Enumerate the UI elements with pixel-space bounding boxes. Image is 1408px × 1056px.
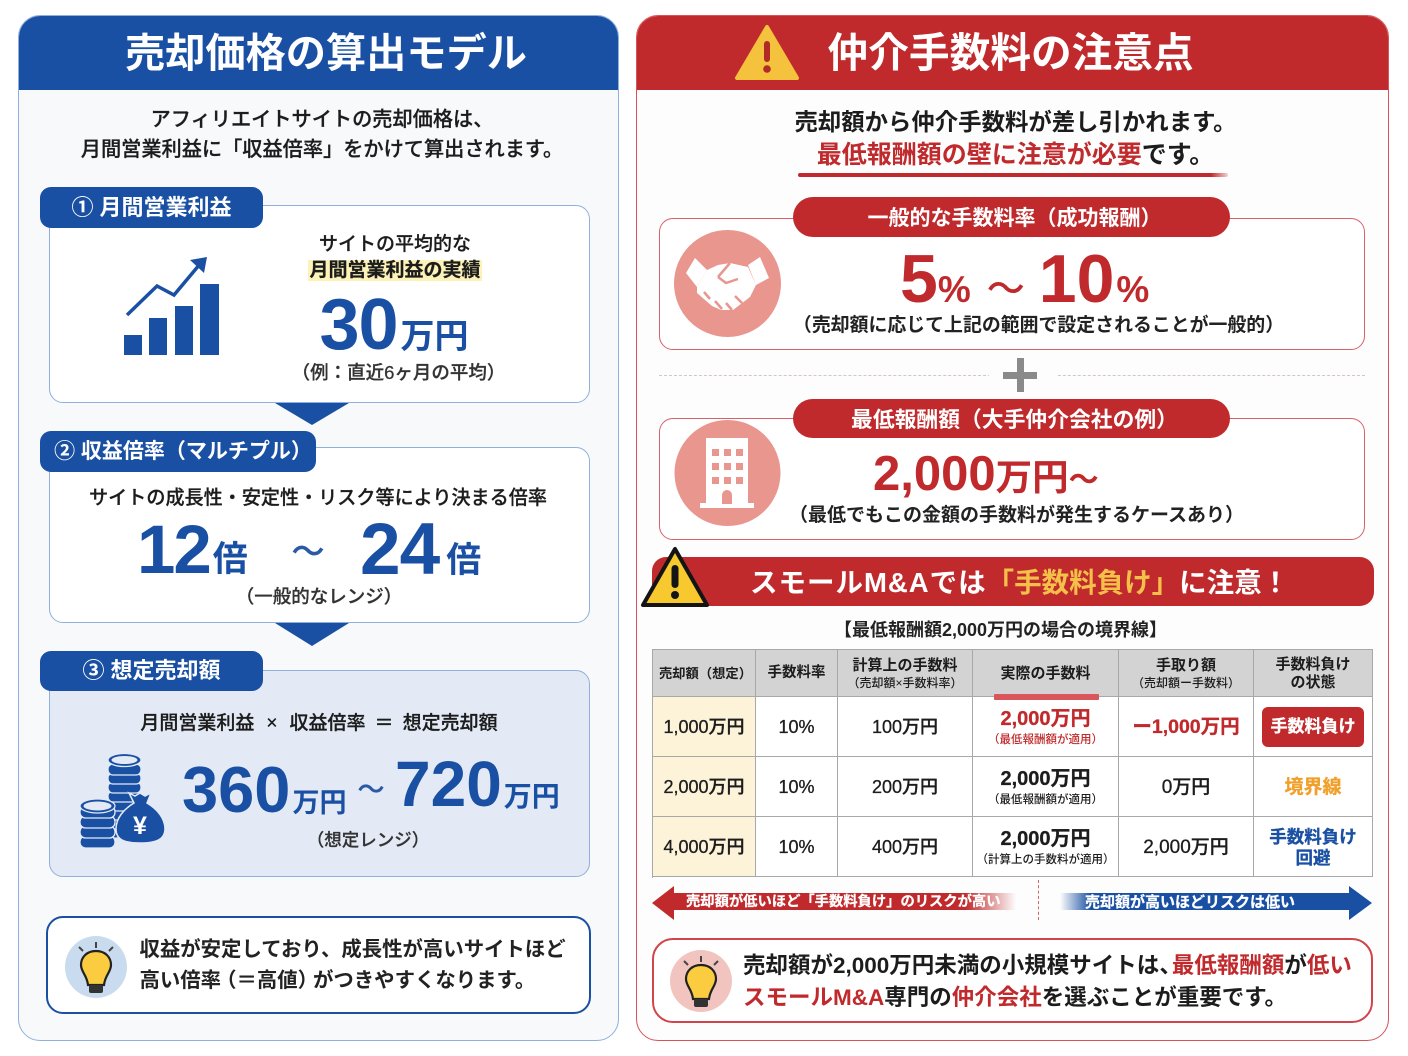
value: 12 times: 12倍 bbox=[137, 511, 248, 588]
table header row: 売却額（想定） bbox=[659, 666, 752, 681]
value: 3.6M yen: 360万円 bbox=[182, 753, 346, 826]
table row: 40M yen: 2,000万円 bbox=[1143, 837, 1229, 858]
text: right tip: スモールM&A専門の仲介会社を選ぶことが重要です。 bbox=[743, 985, 1287, 1010]
panel: broker fee caution bbox=[636, 15, 1389, 1041]
tab: multiple bbox=[40, 431, 316, 472]
icon: handshake bbox=[674, 230, 781, 337]
intro text: right bbox=[794, 109, 1237, 169]
table header row: 実際の手数料 bbox=[1000, 665, 1090, 682]
text: range tilde left: ～ bbox=[292, 533, 324, 570]
table row: 40M yen: 10% bbox=[778, 837, 815, 857]
icon: light bulb left bbox=[65, 936, 127, 998]
table row: 40M yen: 2,000万円 bbox=[1000, 828, 1091, 850]
table header row: （売却額ー手数料） bbox=[1132, 676, 1240, 690]
icon: banner warning bbox=[640, 546, 709, 607]
underline: emphasis bbox=[798, 173, 1228, 177]
table header row: 手取り額 bbox=[1156, 657, 1216, 674]
icon: light bulb right bbox=[670, 950, 732, 1012]
card: estimated sale price bbox=[49, 670, 590, 877]
table row: 20M yen: 境界線 bbox=[1284, 777, 1342, 798]
heading: sale price model bbox=[18, 14, 618, 90]
tab: general fee rate: 一般的な手数料率（成功報酬） bbox=[868, 207, 1162, 230]
table row: 10M yen: 1,000万円 bbox=[663, 717, 745, 737]
table row: 10M yen: 10% bbox=[778, 717, 815, 737]
intro text: left: アフィリエイトサイトの売却価格は、 bbox=[151, 109, 493, 131]
note: general range: （一般的なレンジ） bbox=[236, 586, 402, 607]
card: monthly operating profit bbox=[49, 205, 590, 403]
table header row: 手数料率 bbox=[768, 665, 826, 681]
icon: growth chart bbox=[124, 257, 219, 355]
table header row: 計算上の手数料 bbox=[852, 657, 958, 674]
text: multiple description: サイトの成長性・安定性・リスク等により決まる倍率 bbox=[89, 488, 547, 509]
table row: 40M yen bbox=[653, 817, 1373, 877]
heading: broker fee caution: 仲介手数料の注意点 bbox=[828, 30, 1194, 76]
note: fee rate range: （売却額に応じて上記の範囲で設定されることが一般的） bbox=[793, 315, 1284, 336]
text: right tip: 売却額が2,000万円未満の小規模サイトは、最低報酬額が低い bbox=[743, 953, 1352, 978]
table row: 40M yen: 400万円 bbox=[872, 837, 938, 857]
table row: 10M yen: 手数料負け bbox=[1270, 716, 1356, 736]
divider: risk axis bbox=[1038, 880, 1039, 920]
text: left tip bbox=[140, 938, 566, 992]
tab: minimum fee: 最低報酬額（大手仲介会社の例） bbox=[851, 407, 1178, 432]
heading: sale price model: 売却価格の算出モデル bbox=[125, 30, 527, 76]
value: 24 times: 24倍 bbox=[360, 509, 481, 590]
table row: 40M yen: （計算上の手数料が適用） bbox=[976, 854, 1114, 866]
note: minimum fee: （最低でもこの金額の手数料が発生するケースあり） bbox=[789, 505, 1244, 526]
intro text: right: 最低報酬額の壁に注意が必要です。 bbox=[817, 141, 1214, 169]
separator plus sign bbox=[659, 358, 1365, 392]
tab: estimated sale price bbox=[40, 651, 263, 691]
table accent: actual fee underline bbox=[994, 694, 1099, 700]
intro text: right: 売却額から仲介手数料が差し引かれます。 bbox=[794, 109, 1237, 135]
table row: 20M yen: 10% bbox=[778, 777, 815, 797]
text: banner: スモールM&Aでは「手数料負け」に注意！ bbox=[750, 567, 1289, 598]
tab: multiple: ② 収益倍率（マルチプル） bbox=[54, 440, 312, 463]
arrow: down 2 bbox=[275, 623, 349, 646]
table row: 10M yen: 100万円 bbox=[872, 717, 938, 737]
text: high price risk: 売却額が高いほどリスクは低い bbox=[1085, 894, 1295, 911]
table row: 10M yen bbox=[653, 697, 1373, 757]
card: minimum fee bbox=[659, 418, 1365, 540]
tab: estimated sale price: ③ 想定売却額 bbox=[82, 658, 221, 683]
value: 20M yen minimum: 2,000万円～ bbox=[873, 447, 1099, 501]
tab: general fee rate bbox=[793, 197, 1230, 237]
text: profit description: サイトの平均的な bbox=[319, 234, 471, 255]
table row: 40M yen: 回避 bbox=[1296, 848, 1330, 868]
table row: 20M yen: 2,000万円 bbox=[1000, 768, 1091, 790]
value: 7.2M yen: 720万円 bbox=[395, 748, 560, 820]
text: profit description: 月間営業利益の実績 bbox=[309, 260, 480, 281]
arrow: high price lower risk bbox=[1061, 886, 1372, 920]
table row: 20M yen bbox=[653, 757, 1373, 817]
table title: 【最低報酬額2,000万円の場合の境界線】 bbox=[834, 620, 1167, 640]
icon: coins and money bag bbox=[80, 754, 164, 848]
table row: 20M yen: 200万円 bbox=[872, 777, 938, 797]
tab: minimum fee bbox=[793, 399, 1230, 438]
tab: monthly operating profit bbox=[40, 187, 263, 228]
table row: 10M yen: （最低報酬額が適用） bbox=[988, 734, 1103, 746]
card: multiple bbox=[49, 447, 590, 623]
text: left tip: 収益が安定しており、成長性が高いサイトほど bbox=[140, 939, 566, 961]
table header row: の状態 bbox=[1290, 674, 1336, 691]
table row: 20M yen: （最低報酬額が適用） bbox=[988, 794, 1103, 806]
text: low price risk: 売却額が低いほど「手数料負け」のリスクが高い bbox=[686, 894, 1001, 910]
text: right tip bbox=[743, 953, 1352, 1010]
heading: broker fee caution bbox=[636, 14, 1388, 90]
text: formula: 月間営業利益 × 収益倍率 ＝ 想定売却額 bbox=[140, 713, 498, 734]
table row: 10M yen: 2,000万円 bbox=[1000, 708, 1091, 730]
table row: 10M yen: ー1,000万円 bbox=[1132, 716, 1240, 738]
table row: 20M yen: 2,000万円 bbox=[663, 777, 745, 797]
icon: header warning bbox=[734, 24, 799, 80]
table row: 40M yen: 4,000万円 bbox=[663, 837, 745, 857]
icon: coins and money bag: ¥ bbox=[133, 812, 147, 840]
note: recent average: （例：直近6ヶ月の平均） bbox=[292, 362, 505, 383]
tab: monthly operating profit: ① 月間営業利益 bbox=[71, 195, 232, 220]
intro text: left bbox=[81, 108, 563, 161]
table row: 40M yen: 手数料負け bbox=[1269, 827, 1357, 847]
text: left tip: 高い倍率（＝高値）がつきやすくなります。 bbox=[140, 970, 535, 992]
table row: 20M yen: 0万円 bbox=[1162, 777, 1210, 798]
text: profit description bbox=[308, 234, 482, 281]
icon: office building bbox=[674, 420, 780, 526]
intro text: left: 月間営業利益に「収益倍率」をかけて算出されます。 bbox=[81, 139, 563, 161]
table header row bbox=[653, 650, 1373, 697]
note: estimated range: （想定レンジ） bbox=[307, 830, 429, 850]
table header row: 手数料負け bbox=[1275, 656, 1350, 673]
arrow: low price higher risk bbox=[652, 886, 1014, 920]
panel: sale price model bbox=[18, 15, 619, 1041]
value: 5 to 10 percent: 5% ～10% bbox=[900, 241, 1149, 317]
value: 300k yen: 30万円 bbox=[319, 285, 469, 365]
text: range tilde bottom: ～ bbox=[358, 775, 384, 805]
banner: fee loss warning bbox=[652, 557, 1374, 606]
arrow: down 1 bbox=[275, 403, 349, 425]
table header row: （売却額×手数料率） bbox=[847, 676, 962, 690]
callout: right tip bbox=[652, 938, 1373, 1023]
table: fee loss boundary bbox=[652, 649, 1373, 878]
callout: left tip bbox=[46, 916, 591, 1014]
card: general fee rate bbox=[659, 218, 1365, 350]
